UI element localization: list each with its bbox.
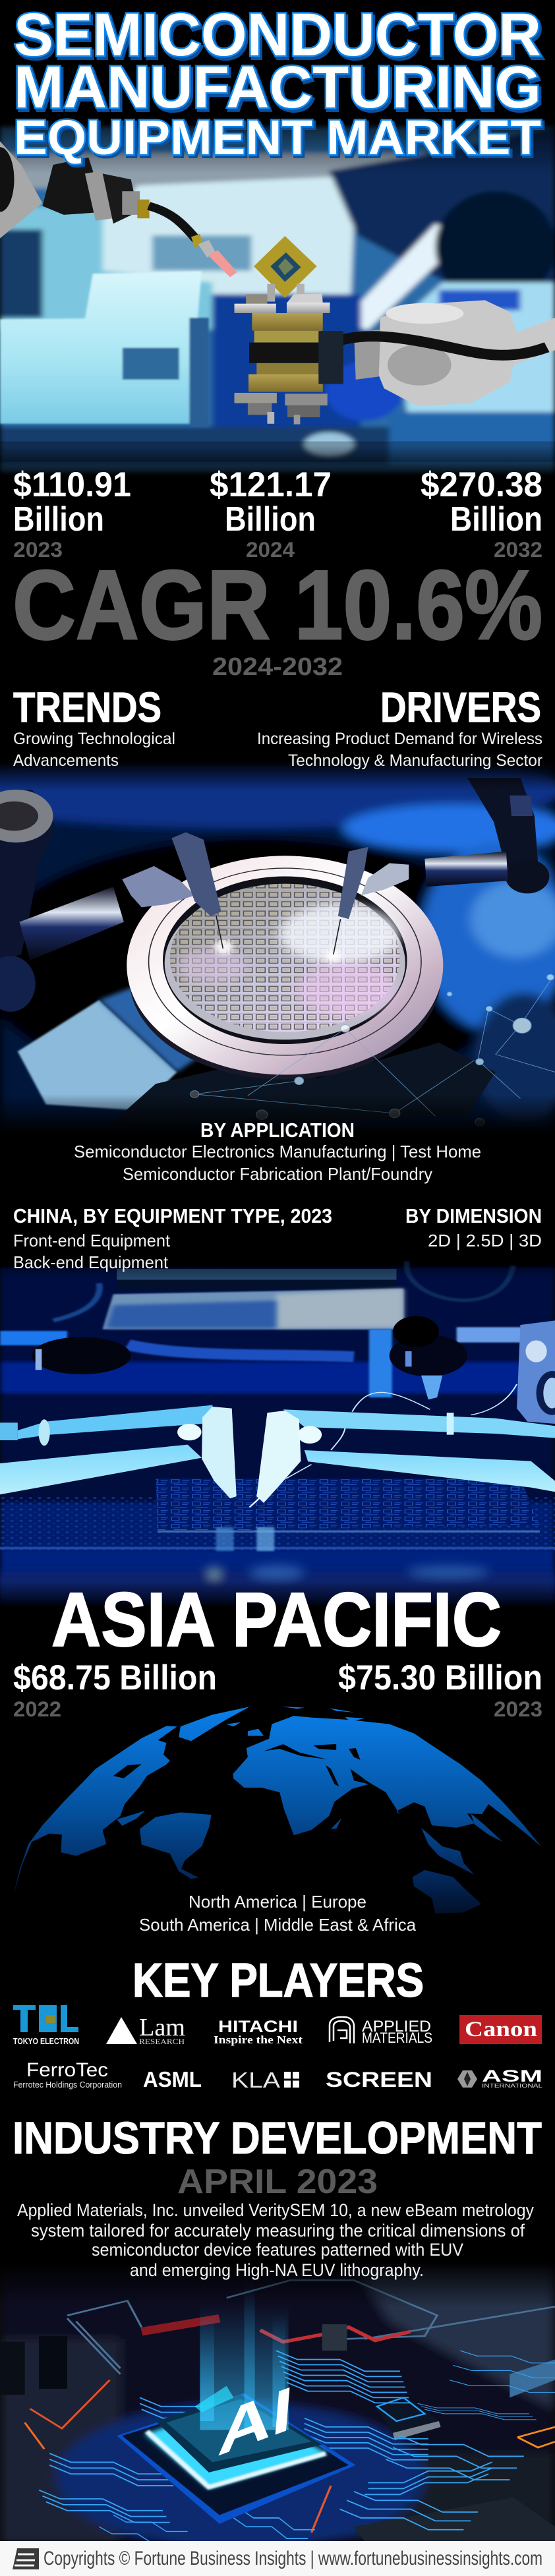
stat 2024: $121.17 xyxy=(210,465,332,504)
hero: bottom shade xyxy=(0,442,555,462)
probe image: black clamps xyxy=(32,1316,467,1399)
hero: fade into black at base xyxy=(0,446,555,479)
stat 2023: 2023 xyxy=(13,538,63,562)
AI image: dark backdrop xyxy=(0,2263,555,2550)
probe image: right tweezer arm xyxy=(256,1409,555,1503)
right probe arm xyxy=(334,778,549,954)
logo: Hitachi xyxy=(214,2018,303,2046)
footer logo xyxy=(13,2548,39,2569)
by dimension xyxy=(405,1204,542,1250)
globe: Eurasia and Africa xyxy=(233,1716,542,1847)
globe: inland seas xyxy=(113,1734,361,1786)
asia pacific values: 2022 xyxy=(13,1697,61,1721)
probe image: silver plate xyxy=(517,1320,555,1424)
logo: Ferrotec: FerroTec xyxy=(26,2059,108,2081)
footer bar xyxy=(0,2541,555,2576)
left probe arm xyxy=(0,790,223,1012)
title line 3: EQUIPMENT MARKET xyxy=(16,112,543,167)
logo: Lam Research: RESEARCH xyxy=(139,2037,185,2046)
stat 2023 xyxy=(13,465,131,562)
china by equipment type xyxy=(13,1204,332,1272)
title line 1: SEMICONDUCTOR xyxy=(14,1,541,69)
hero image: robotic arms holding chip xyxy=(0,124,555,475)
logo: Applied Materials: APPLIED xyxy=(362,2018,431,2035)
logo: Canon xyxy=(459,2015,542,2044)
trends xyxy=(13,684,175,770)
wafer image: top and bottom fades xyxy=(0,761,555,791)
trends: TRENDS xyxy=(13,684,161,731)
development description: system tailored for accurately measuring the critical dimensions of xyxy=(31,2221,525,2240)
logo: Lam Research xyxy=(106,2014,185,2046)
hero: brass gripper stack xyxy=(234,284,330,424)
wafer image: blue backdrop xyxy=(0,751,555,1137)
probe image: silver bar xyxy=(103,1289,403,1330)
hero: upper left robot arm with welding torch xyxy=(0,141,237,278)
stat 2032: $270.38 xyxy=(421,465,542,504)
probe image: contact spark xyxy=(250,1498,260,1508)
stat 2024 xyxy=(210,465,332,562)
probe image: circuit board xyxy=(0,1478,555,1551)
wafer image: circuit shapes under chuck xyxy=(115,1043,496,1121)
china by equipment type: CHINA, BY EQUIPMENT TYPE, 2023 xyxy=(13,1204,332,1227)
drivers: Increasing Product Demand for Wireless xyxy=(257,730,542,748)
AI image: small components xyxy=(0,2324,555,2542)
probe image: top fade xyxy=(1,1260,554,1275)
hero: right robot arm with cable xyxy=(318,300,555,406)
logo: KLA xyxy=(231,2068,299,2092)
hero background: blurred factory scene xyxy=(0,127,555,474)
stat 2023: $110.91 xyxy=(13,465,131,504)
drivers: Technology & Manufacturing Sector xyxy=(288,751,542,770)
key player logos xyxy=(13,2005,543,2092)
asia pacific heading: ASIA PACIFIC xyxy=(51,1577,502,1662)
logo: Applied Materials xyxy=(330,2017,432,2046)
probe glints xyxy=(214,939,341,962)
globe: Central America and Caribbean xyxy=(117,1811,145,1826)
logo: Tokyo Electron xyxy=(13,2005,79,2046)
probe image: white cable xyxy=(278,1384,517,1483)
development description xyxy=(17,2200,534,2280)
stat 2032: Billion xyxy=(450,500,542,539)
development date: APRIL 2023 xyxy=(177,2163,378,2201)
stat 2032 xyxy=(421,465,542,562)
stat 2024: Billion xyxy=(225,500,316,539)
china by equipment type: Back-end Equipment xyxy=(13,1252,169,1272)
globe: Southeast Asia islands xyxy=(421,1813,503,1875)
silicon wafer with dies xyxy=(170,884,400,1032)
network overlay xyxy=(190,974,555,1126)
CAGR period: 2024-2032 xyxy=(212,653,343,681)
china by equipment type: Front-end Equipment xyxy=(13,1231,171,1250)
asia pacific values: 2023 xyxy=(494,1697,542,1721)
world globe map xyxy=(13,1707,542,1914)
by dimension: 2D | 2.5D | 3D xyxy=(428,1231,542,1250)
stat 2023: Billion xyxy=(13,500,104,539)
logo: ASML: ASML xyxy=(143,2067,202,2092)
logo: Hitachi: HITACHI xyxy=(218,2018,298,2036)
by application: Semiconductor Fabrication Plant/Foundry xyxy=(123,1164,432,1184)
logo: Canon: Canon xyxy=(465,2018,537,2041)
probe image: fade to black xyxy=(0,1582,555,1608)
other regions: North America | Europe xyxy=(189,1892,366,1912)
probe image: left tweezer arm xyxy=(0,1405,237,1498)
probe station image xyxy=(0,1239,555,1608)
development description: and emerging High-NA EUV lithography. xyxy=(130,2260,424,2280)
hero: processor chip xyxy=(254,236,317,298)
AI chip package xyxy=(117,2393,356,2524)
title line 2: MANUFACTURING xyxy=(16,57,543,123)
logo: Ferrotec: Ferrotec Holdings Corporation xyxy=(13,2080,122,2090)
probe image: heat sink xyxy=(117,1269,396,1290)
development description: semiconductor device features patterned with EUV xyxy=(92,2240,463,2260)
title line 3: EQUIPMENT MARKET xyxy=(14,110,541,165)
AI image: red traces xyxy=(25,2318,555,2532)
AI image: outline traces xyxy=(67,2280,555,2374)
wafer chuck outer ring xyxy=(130,986,440,1080)
trends: Advancements xyxy=(13,751,119,770)
AI image: top fade xyxy=(0,2261,555,2307)
logo: Screen: SCREEN xyxy=(326,2068,432,2092)
by application xyxy=(74,1119,481,1184)
by dimension: BY DIMENSION xyxy=(405,1204,542,1227)
market size figures xyxy=(13,465,542,562)
stat 2024: 2024 xyxy=(246,538,295,562)
by application: BY APPLICATION xyxy=(200,1119,355,1142)
AI chip image xyxy=(0,2261,555,2550)
logo: Tokyo Electron: TOKYO ELECTRON xyxy=(13,2036,79,2046)
AI image: blue circuit traces xyxy=(39,2351,555,2543)
probe image: blue tubes and cables xyxy=(0,1261,524,1397)
logo: ASM International: INTERNATIONAL xyxy=(482,2083,543,2089)
globe: Madagascar xyxy=(331,1818,341,1829)
stat 2032: 2032 xyxy=(494,538,542,562)
logo: ASM International: ASM xyxy=(482,2067,542,2086)
wafer recess xyxy=(163,877,407,1044)
by application: Semiconductor Electronics Manufacturing | Test Home xyxy=(74,1142,481,1161)
hero: top fade to black xyxy=(0,123,555,170)
drivers xyxy=(257,684,542,770)
hero: white machine block xyxy=(0,272,209,426)
other regions xyxy=(139,1892,417,1935)
AI label on chip: AI xyxy=(216,2372,296,2470)
key players heading: KEY PLAYERS xyxy=(132,1954,424,2007)
AI holographic beams xyxy=(194,2280,289,2433)
asia pacific values: $68.75 Billion xyxy=(13,1658,217,1697)
title line 2: MANUFACTURING xyxy=(14,55,541,121)
title xyxy=(14,1,543,167)
trends: Growing Technological xyxy=(13,730,175,748)
wafer image: reflected panel xyxy=(18,1000,177,1110)
logo: KLA: KLA xyxy=(231,2068,280,2092)
logo: ASM International xyxy=(457,2067,543,2089)
globe: Arctic islands xyxy=(227,1707,365,1736)
globe: Greenland xyxy=(179,1707,250,1741)
probe image: bottom blurred strip xyxy=(0,1566,555,1598)
globe: North America xyxy=(13,1726,177,1896)
globe: South America xyxy=(140,1812,212,1879)
asia pacific values xyxy=(13,1658,542,1721)
logo: Applied Materials: MATERIALS xyxy=(362,2030,432,2046)
globe: Australia xyxy=(413,1870,481,1914)
asia pacific values: $75.30 Billion xyxy=(338,1658,542,1697)
probe image: backdrop xyxy=(0,1239,555,1608)
logo: Hitachi: Inspire the Next xyxy=(214,2034,303,2046)
title line 1: SEMICONDUCTOR xyxy=(16,4,543,71)
logo: Lam Research: Lam xyxy=(139,2014,185,2041)
logo: Ferrotec xyxy=(13,2059,122,2090)
wafer image xyxy=(0,751,555,1154)
other regions: South America | Middle East & Africa xyxy=(139,1915,417,1935)
